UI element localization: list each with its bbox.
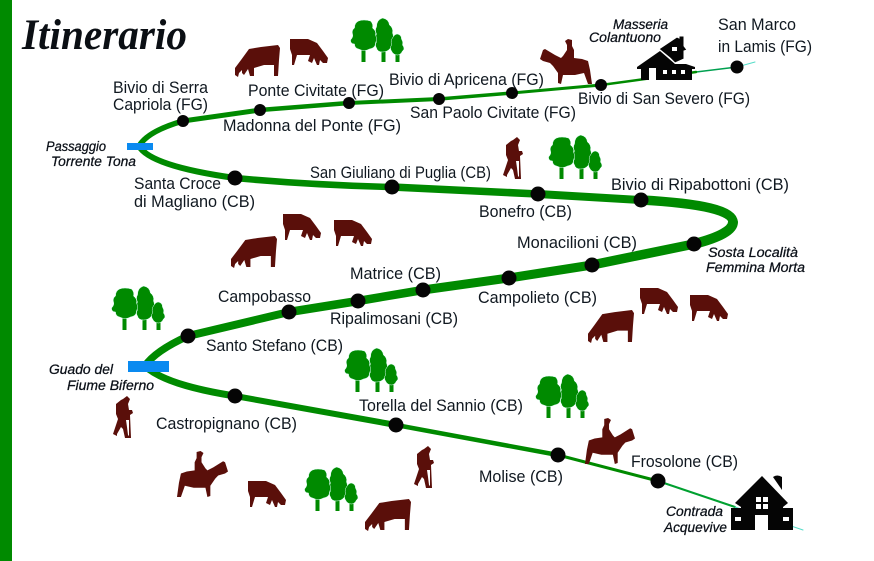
note: Passaggio Torrente Tona: Torrente Tona [51,154,136,169]
icon: house Contrada Acquevive [731,476,793,530]
label: Santa Croce di Magliano: Santa Croce [134,175,221,193]
icon: cow [248,481,286,507]
label: Bivio di Serra Capriola: Bivio di Serra [113,79,209,97]
label: Castropignano: Castropignano (CB) [156,415,297,433]
label: San Paolo Civitate: San Paolo Civitate (FG) [410,104,576,122]
icon: horse rider [585,418,635,464]
label: Torella del Sannio: Torella del Sannio (CB) [359,397,523,415]
icon: cow [283,214,321,240]
icon: trees [350,18,404,62]
icon: trees [304,467,358,511]
label: Molise: Molise (CB) [479,468,563,486]
label: Madonna del Ponte: Madonna del Ponte (FG) [223,117,401,135]
icon: cow [640,288,678,314]
label: Frosolone: Frosolone (CB) [631,453,738,471]
icon: hiker [503,137,523,179]
icon: farmhouse Masseria Colantuono [637,36,695,80]
icon: trees [112,286,165,330]
note: Contrada Acquevive: Acquevive [663,520,727,535]
note: Passaggio Torrente Tona: Passaggio [46,139,106,154]
label: Bonefro: Bonefro (CB) [479,203,572,221]
note: Sosta Località Femmina Morta: Sosta Località [708,245,799,260]
note: Contrada Acquevive: Contrada [666,504,723,519]
label: Matrice: Matrice (CB) [350,265,441,283]
icon: hiker [414,446,434,488]
icon: cow [690,295,728,321]
icon: hiker [113,396,133,438]
label: Bivio di Serra Capriola: Capriola (FG) [113,96,208,114]
icon: cow [235,45,280,77]
label: San Giuliano di Puglia: San Giuliano di Puglia (CB) [310,164,491,182]
label: Monacilioni: Monacilioni (CB) [517,234,637,252]
icon: cow [231,236,277,268]
icon: trees [536,374,589,418]
left green band [0,0,12,561]
label: Bivio di Ripabottoni: Bivio di Ripabottoni (CB) [611,176,789,194]
icon: cow [290,39,328,65]
label: Bivio di Apricena: Bivio di Apricena (FG) [389,71,544,89]
icon: cow [365,499,411,531]
label: Santo Stefano: Santo Stefano (CB) [206,337,343,355]
label: Santa Croce di Magliano: di Magliano (CB) [134,193,255,211]
icon: horse rider [177,451,228,497]
note: Masseria Colantuono: Masseria [613,17,668,32]
note: Guado del Fiume Biferno: Fiume Biferno [67,378,154,393]
title: Itinerario [21,12,187,59]
label: Bivio di San Severo: Bivio di San Severo (FG) [578,90,750,108]
note: Masseria Colantuono: Colantuono [589,30,662,45]
winding route line [139,62,803,530]
icon: cow [334,220,372,246]
label: San Marco in Lamis: in Lamis (FG) [718,38,812,56]
icon: horse rider [540,39,592,84]
label: Campobasso: Campobasso [218,288,311,306]
note: Guado del Fiume Biferno: Guado del [49,362,114,377]
note: Sosta Località Femmina Morta: Femmina Morta [706,260,806,275]
label: Ripalimosani: Ripalimosani (CB) [330,310,458,328]
river crossing: Fiume Biferno [128,361,169,372]
river crossing: Torrente Tona [127,143,153,150]
route stops [177,60,744,488]
label: San Marco in Lamis: San Marco [718,16,796,34]
label: Ponte Civitate: Ponte Civitate (FG) [248,82,384,100]
stop labels [113,16,812,486]
icon: trees [344,348,398,392]
icon: trees [548,135,602,179]
label: Campolieto: Campolieto (CB) [478,289,597,307]
icon: cow [588,310,634,343]
